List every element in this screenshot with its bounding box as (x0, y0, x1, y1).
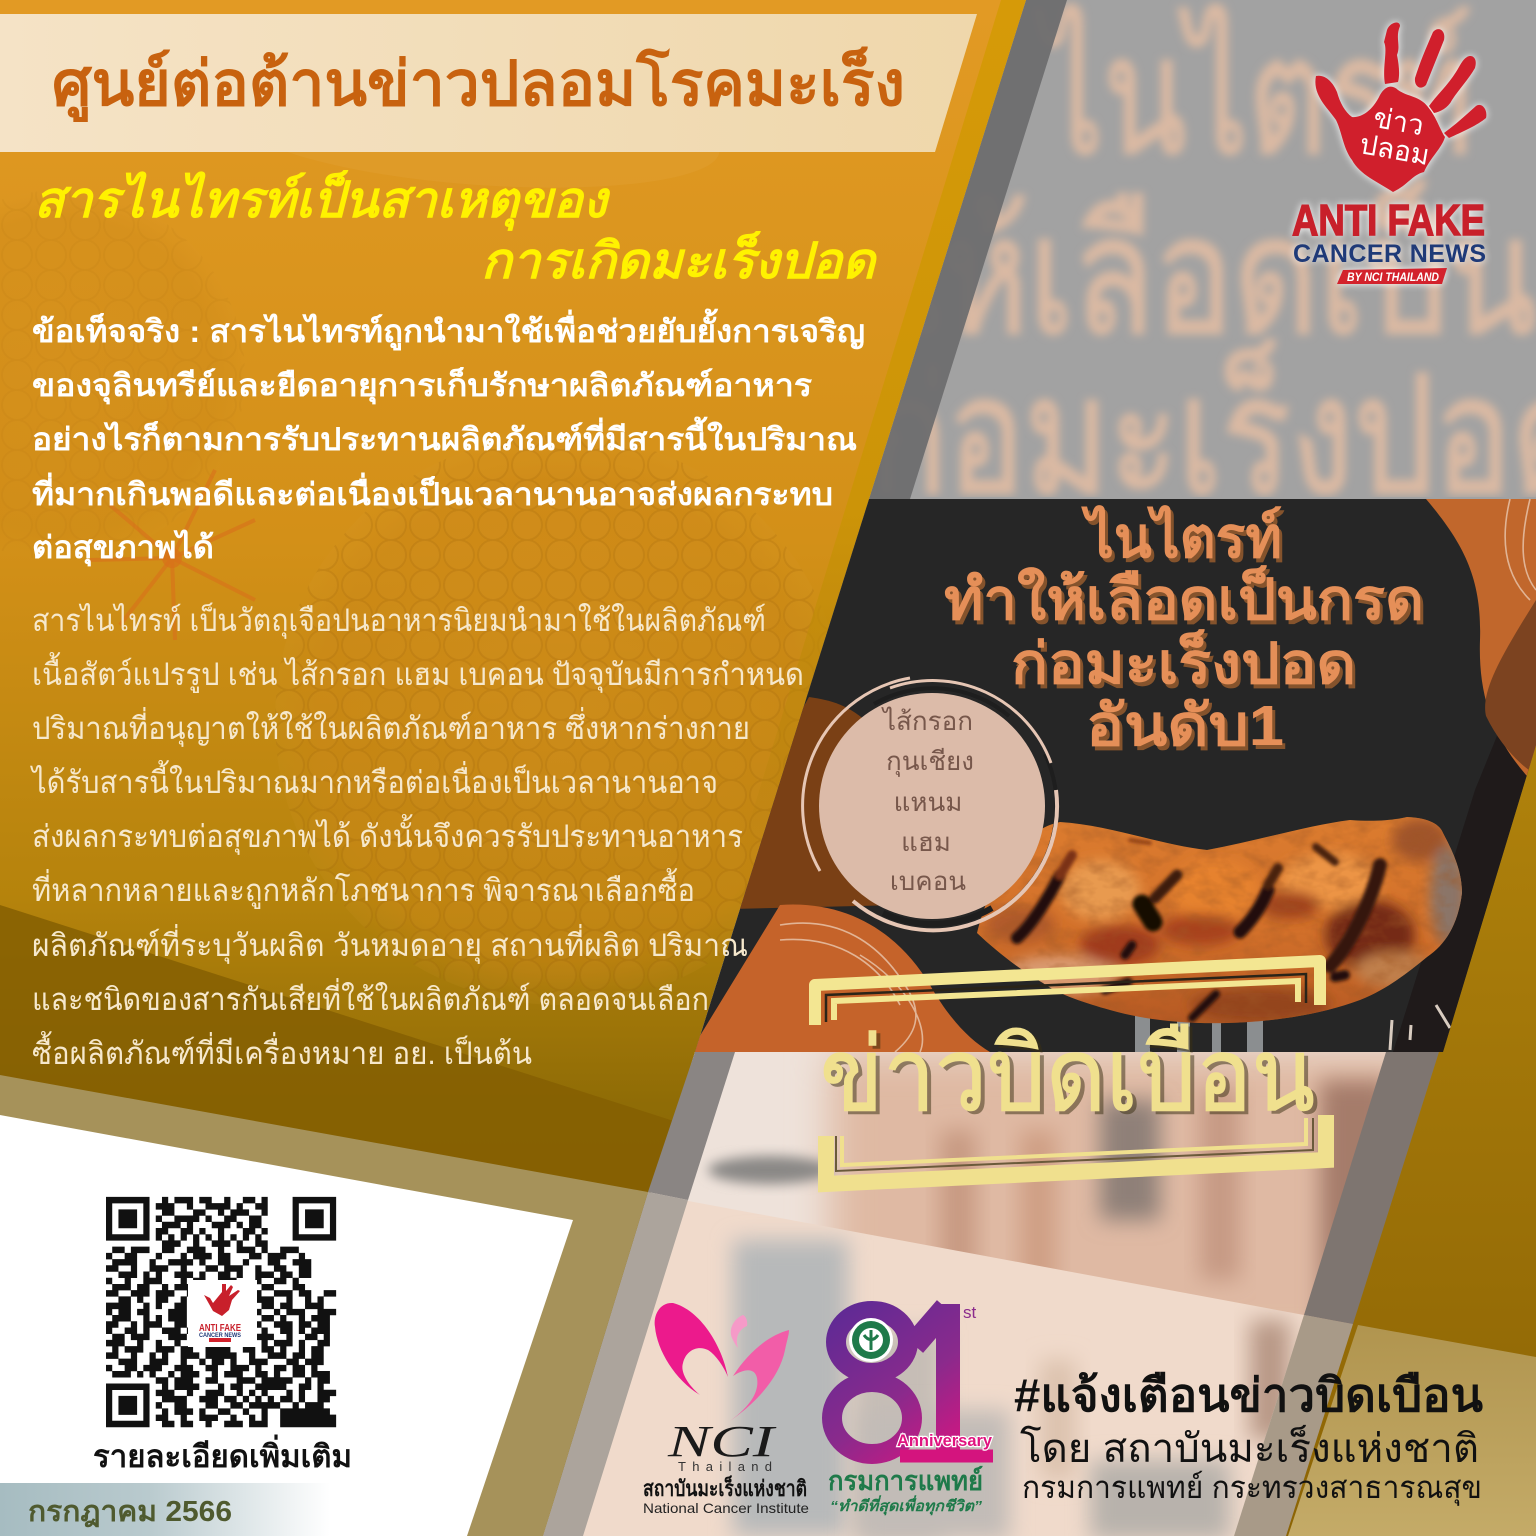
background: plate below diagonal (560, 1190, 1320, 1536)
texture: mottled skin (982, 819, 1462, 1008)
logo: Anti Fake Cancer News: CANCER NEWS (1293, 240, 1486, 268)
logo: Department of Medical Services 81st anniversary: “ทำดีที่สุดเพื่อทุกชีวิต” (830, 1495, 983, 1516)
advert headline: ก่อมะเร็งปอด (1014, 632, 1359, 700)
advert headline (944, 505, 1427, 762)
shapes: advert brown and orange blobs (690, 499, 1536, 1052)
background: amber cell photo panel (0, 0, 1100, 1536)
logo: Anti Fake Cancer News: ปลอม (1357, 128, 1432, 171)
text block: explanation paragraph: ปริมาณที่อนุญาตให้ใช้ในผลิตภัณฑ์อาหาร ซึ่งหากร่างกาย (32, 707, 750, 748)
advert headline: ไนไตรท์ (1084, 509, 1285, 574)
text block: hashtag and organisation: กรมการแพทย์ กระทรวงสาธารณสุข (1022, 1470, 1482, 1507)
text block: hashtag and organisation (1014, 1369, 1484, 1507)
background: blurred headline photo area (869, 0, 1536, 499)
text block: fact paragraph: ข้อเท็จจริง : สารไนไทรท์ถูกนำมาใช้เพื่อช่วยยับยั้งการเจริญ (32, 308, 865, 351)
logo: National Cancer Institute: สถาบันมะเร็งแห่งชาติ (643, 1474, 807, 1501)
icon: number 81 (832, 1304, 993, 1456)
text block: fact paragraph (32, 308, 865, 567)
text block: fact paragraph: ของจุลินทรีย์และยืดอายุการเก็บรักษาผลิตภัณฑ์อาหาร (32, 366, 812, 405)
callout: round food list (803, 678, 1057, 930)
icon: red hand (1315, 23, 1486, 192)
illustration: grilled sausage on fork (977, 817, 1462, 1052)
text block: explanation paragraph: และชนิดของสารกันเสียที่ใช้ในผลิตภัณฑ์ ตลอดจนเลือก (32, 978, 709, 1017)
date strip (0, 1483, 330, 1536)
logo: National Cancer Institute: NCI (667, 1417, 777, 1466)
logo: Anti Fake Cancer News: BY NCI THAILAND (1347, 270, 1439, 284)
callout: round food list: ไส้กรอก (881, 706, 973, 736)
QR code (100, 1192, 342, 1432)
subtitle: myth claim: การเกิดมะเร็งปอด (481, 230, 878, 289)
callout: round food list: เบคอน (890, 866, 966, 896)
background: tan diagonal band left (0, 1075, 648, 1536)
callout: round food list: แฮม (901, 827, 951, 857)
background: blurred sausage lower photo (540, 1052, 1460, 1536)
logo: National Cancer Institute (643, 1303, 809, 1516)
callout: round food list: กุนเชียง (886, 746, 974, 777)
text block: explanation paragraph: ที่หลากหลายและถูกหลักโภชนาการ พิจารณาเลือกซื้อ (32, 868, 695, 909)
background: tan diagonal band right (1288, 1325, 1536, 1536)
text block: hashtag and organisation: โดย สถาบันมะเร็งแห่งชาติ (1020, 1424, 1479, 1471)
logo: Anti Fake Cancer News: ANTI FAKE (1292, 196, 1485, 245)
panel: white QR area (0, 1115, 573, 1536)
callout: round food list: แหนม (894, 787, 962, 817)
text block: explanation paragraph: ผลิตภัณฑ์ที่ระบุวันผลิต วันหมดอายุ สถานที่ผลิต ปริมาณ (32, 924, 748, 965)
icon: ministry seal (849, 1318, 893, 1362)
advert headline: ก่อมะเร็งปอด (1011, 628, 1356, 696)
logo: Department of Medical Services 81st anniversary: Anniversary (897, 1431, 993, 1450)
logo: Department of Medical Services 81st anniversary: กรมการแพทย์ (828, 1465, 983, 1496)
date strip: กรกฎาคม 2566 (28, 1496, 232, 1528)
background: gold and slate diagonal stripes (741, 0, 1067, 850)
panel: dark sausage advert (690, 499, 1536, 1052)
stamp: fake-news frame and headline (815, 961, 1326, 1184)
advert headline: ไนไตรท์ (1081, 505, 1282, 570)
text block: explanation paragraph: ได้รับสารนี้ในปริมาณมากหรือต่อเนื่องเป็นเวลานานอาจ (29, 760, 718, 800)
grill marks (1017, 840, 1380, 1018)
logo: Department of Medical Services 81st anniversary: st (963, 1303, 976, 1322)
advert headline: อันดับ1 (1089, 698, 1287, 762)
text block: explanation paragraph: สารไนไทรท์ เป็นวัตถุเจือปนอาหารนิยมนำมาใช้ในผลิตภัณฑ์ (32, 602, 766, 640)
icon: QR centre logo (188, 1280, 257, 1347)
icon: pink butterfly heart (655, 1303, 789, 1421)
stamp: fake-news frame and headline: ข่าวบิดเบือน (820, 1018, 1315, 1132)
background: slate stripes on lower photo (543, 1052, 1443, 1536)
icon: fork tines (1135, 1010, 1263, 1052)
advert headline: ทำให้เลือดเป็นกรด (944, 564, 1424, 632)
logo: Anti Fake Cancer News: ข่าว (1371, 102, 1426, 141)
text block: fact paragraph: ที่มากเกินพอดีและต่อเนื่องเป็นเวลานานอาจส่งผลกระทบ (32, 472, 833, 512)
stamp: fake-news frame and headline: ข่าวบิดเบือน (824, 1021, 1319, 1135)
logo: Department of Medical Services 81st anniversary (828, 1303, 993, 1516)
advert headline: อันดับ1 (1086, 694, 1284, 758)
text block: fact paragraph: อย่างไรก็ตามการรับประทานผลิตภัณฑ์ที่มีสารนี้ในปริมาณ (32, 416, 857, 457)
text block: explanation paragraph: เนื้อสัตว์แปรรูป เช่น ไส้กรอก แฮม เบคอน ปัจจุบันมีการกำหนด (32, 652, 804, 694)
shape: orange top right blob (1426, 499, 1536, 790)
icon: QR centre logo: ANTI FAKE (199, 1323, 241, 1334)
advert headline: ทำให้เลือดเป็นกรด (947, 568, 1427, 636)
logo: National Cancer Institute: National Cancer Institute (643, 1500, 809, 1516)
background: gold right wedge (1286, 745, 1536, 1536)
subtitle: myth claim: สารไนไทรท์เป็นสาเหตุของ (34, 169, 611, 231)
title: ศูนย์ต่อต้านข่าวปลอมโรคมะเร็ง (52, 46, 905, 122)
icon: QR centre logo: CANCER NEWS (199, 1333, 241, 1339)
text block: fact paragraph: ต่อสุขภาพได้ (32, 529, 214, 567)
text block: explanation paragraph: ส่งผลกระทบต่อสุขภาพได้ ดังนั้นจึงควรรับประทานอาหาร (32, 814, 743, 856)
logo: National Cancer Institute: Thailand (678, 1459, 772, 1474)
text block: explanation paragraph: ซื้อผลิตภัณฑ์ที่มีเครื่องหมาย อย. เป็นต้น (32, 1031, 532, 1071)
subtitle: myth claim (34, 169, 878, 289)
title banner (0, 14, 977, 152)
QR caption: รายละเอียดเพิ่มเติม (93, 1434, 352, 1474)
logo: Anti Fake Cancer News (1292, 23, 1486, 284)
text block: explanation paragraph (29, 602, 804, 1071)
text block: hashtag and organisation: #แจ้งเตือนข่าวบิดเบือน (1014, 1369, 1484, 1421)
